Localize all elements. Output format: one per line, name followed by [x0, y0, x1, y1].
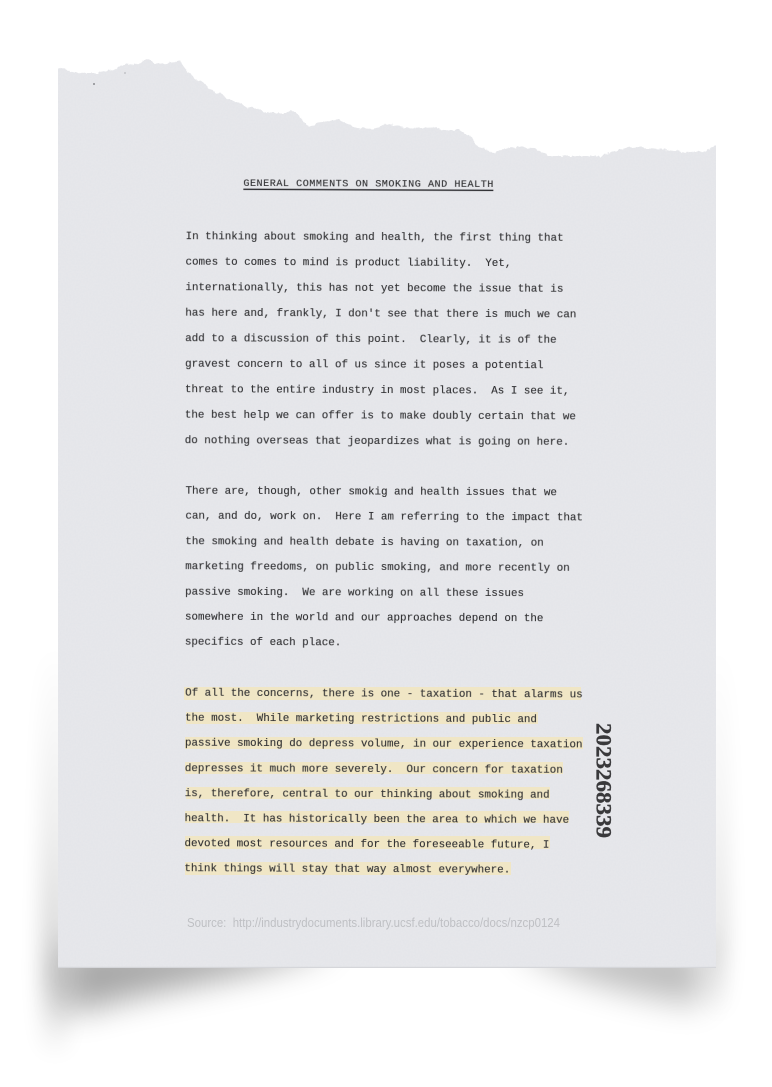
- paragraph 1: threat to the entire industry in most places. As I see it,: [185, 384, 569, 398]
- paragraph 1: In thinking about smoking and health, the first thing that: [186, 231, 564, 245]
- paragraph 1: [185, 231, 577, 449]
- paper drop shadow: [40, 640, 728, 1060]
- paragraph 3: highlighted text: [184, 688, 583, 877]
- paragraph 1: has here and, frankly, I don't see that there is much we can: [185, 308, 576, 321]
- paragraph 3: highlighted text: the most. While marketing restrictions and public and: [185, 713, 537, 726]
- bates stamp number: 2023268339: [592, 723, 616, 838]
- paragraph 3: highlighted text: depresses it much more severely. Our concern for taxation: [185, 763, 563, 777]
- highlight: taxation paragraph: [184, 687, 583, 875]
- paragraph 1: do nothing overseas that jeopardizes what is going on here.: [185, 435, 569, 449]
- paragraph 3: highlighted text: is, therefore, central to our thinking about smoking and: [185, 788, 550, 802]
- paragraph 3: highlighted text: devoted most resources and for the foreseeable future, I: [184, 838, 549, 852]
- paragraph 3: highlighted text: health. It has historically been the area to which we have: [185, 813, 569, 827]
- paragraph 2: can, and do, work on. Here I am referring to the impact that: [185, 511, 583, 525]
- paragraph 2: specifics of each place.: [185, 637, 341, 650]
- paragraph 2: [185, 486, 583, 651]
- paragraph 1: the best help we can offer is to make doubly certain that we: [185, 410, 576, 423]
- paragraph 3: highlighted text: think things will stay that way almost everywhere.: [184, 863, 510, 877]
- paragraph 2: the smoking and health debate is having on taxation, on: [185, 536, 544, 550]
- paragraph 3: highlighted text: passive smoking do depress volume, in our experience taxation: [185, 738, 582, 752]
- paragraph 2: passive smoking. We are working on all these issues: [185, 586, 524, 600]
- paragraph 2: marketing freedoms, on public smoking, and more recently on: [185, 561, 570, 575]
- paragraph 2: somewhere in the world and our approaches depend on the: [185, 612, 543, 625]
- paragraph 3: highlighted text: Of all the concerns, there is one - taxation - that alarms us: [185, 688, 583, 701]
- paragraph 2: There are, though, other smokig and health issues that we: [186, 486, 557, 499]
- paragraph 1: comes to comes to mind is product liability. Yet,: [186, 257, 511, 270]
- paragraph 1: gravest concern to all of us since it poses a potential: [185, 359, 544, 372]
- title: GENERAL COMMENTS ON SMOKING AND HEALTH: [243, 179, 493, 191]
- paragraph 1: add to a discussion of this point. Clearly, it is of the: [185, 333, 557, 347]
- paragraph 1: internationally, this has not yet become the issue that is: [185, 282, 563, 296]
- typed document text: [183, 179, 585, 877]
- source line: Source: http://industrydocuments.library.ucsf.edu/tobacco/docs/nzcp0124: [187, 916, 560, 930]
